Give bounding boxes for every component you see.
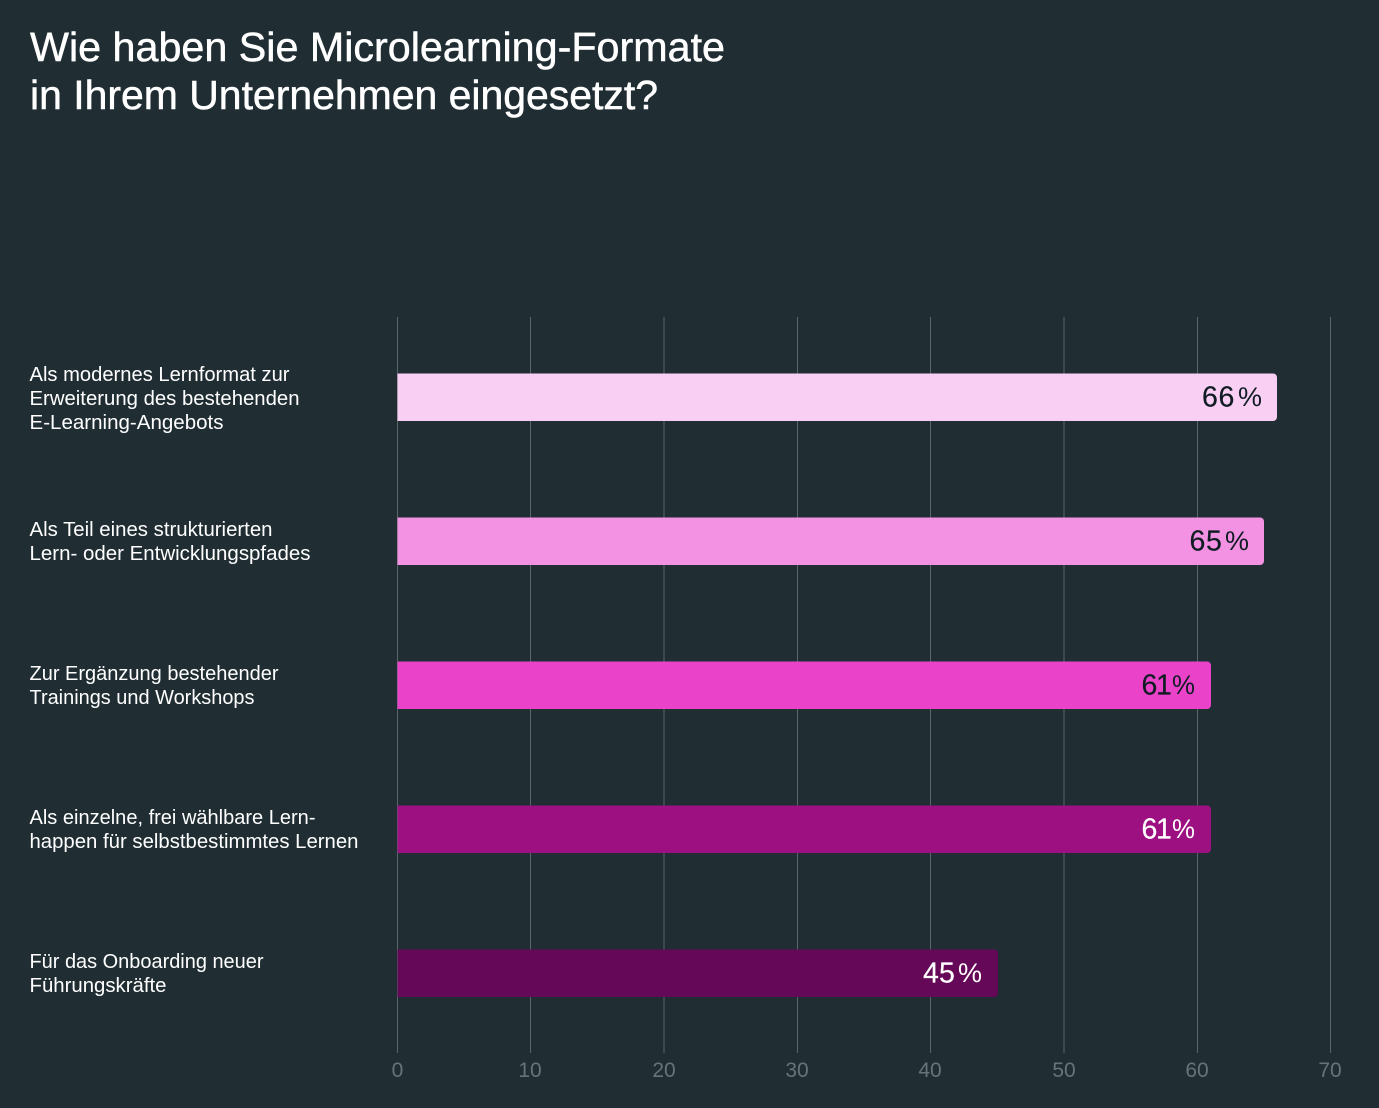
- row 1 bar: 66: [1202, 382, 1234, 414]
- row 5 bar: %: [958, 958, 982, 988]
- x axis labels: 70: [1318, 1059, 1342, 1082]
- row 3 bar: 61: [1142, 670, 1172, 702]
- x axis labels: 50: [1052, 1059, 1076, 1082]
- row 1 label: Als modernes Lernformat zur: [30, 363, 290, 386]
- row 1 label: Erweiterung des bestehenden: [30, 387, 300, 410]
- row 4 label: [30, 806, 358, 853]
- row 4 label: happen für selbstbestimmtes Lernen: [30, 830, 358, 853]
- row 2 bar: %: [1225, 526, 1249, 556]
- x axis labels: 0: [392, 1059, 403, 1082]
- title: Wie haben Sie Microlearning-Formate: [30, 24, 725, 70]
- title: [30, 24, 725, 118]
- row 3 label: Zur Ergänzung bestehender: [30, 662, 279, 685]
- row 5 label: [30, 950, 264, 997]
- row 3 label: Trainings und Workshops: [30, 686, 254, 709]
- title: in Ihrem Unternehmen eingesetzt?: [30, 72, 658, 118]
- row 2 label: Als Teil eines strukturierten: [30, 518, 272, 541]
- row 5 label: Führungskräfte: [30, 974, 166, 997]
- row 5 bar: [398, 950, 998, 997]
- row 4 bar: [398, 806, 1211, 853]
- row 1 bar: %: [1238, 382, 1262, 412]
- row 4 bar: 61: [1142, 814, 1172, 846]
- row 3 bar: [398, 662, 1211, 709]
- row 2 label: Lern- oder Entwicklungspfades: [30, 542, 310, 565]
- row 3 label: [30, 662, 279, 709]
- row 2 bar: [398, 518, 1264, 565]
- row 5 bar: 45: [923, 958, 955, 990]
- row 4 label: Als einzelne, frei wählbare Lern-: [30, 806, 316, 829]
- row 2 label: [30, 518, 310, 565]
- row 2 bar: 65: [1190, 526, 1222, 558]
- x axis labels: [392, 1059, 1342, 1082]
- x axis labels: 30: [785, 1059, 809, 1082]
- row 3 bar: %: [1172, 670, 1195, 700]
- x axis labels: 10: [518, 1059, 542, 1082]
- x axis labels: 20: [652, 1059, 676, 1082]
- row 1 label: [30, 363, 300, 434]
- x axis labels: 40: [918, 1059, 942, 1082]
- row 1 label: E-Learning-Angebots: [30, 411, 224, 434]
- x axis labels: 60: [1185, 1059, 1209, 1082]
- row 5 label: Für das Onboarding neuer: [30, 950, 264, 973]
- row 4 bar: %: [1172, 814, 1195, 844]
- row 1 bar: [398, 374, 1277, 421]
